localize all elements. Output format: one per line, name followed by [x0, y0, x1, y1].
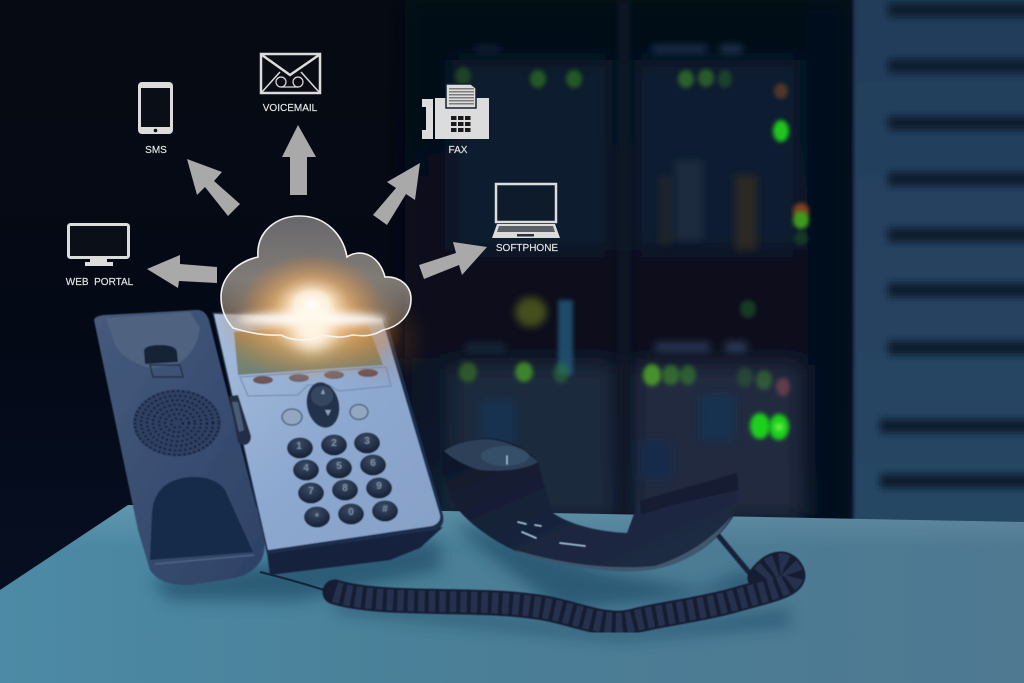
arrow: to web portal [147, 255, 217, 288]
handset highlights [507, 456, 585, 546]
keypad: 5 [336, 461, 342, 472]
keypad: * [315, 512, 319, 523]
mouthpiece rim [640, 473, 738, 515]
status lights [455, 67, 809, 440]
keypad: # [382, 504, 388, 515]
handset body [442, 438, 738, 571]
phone screen [234, 322, 383, 375]
server rack [405, 0, 850, 530]
icon: sms tablet [138, 82, 173, 134]
speaker grille [133, 390, 221, 456]
cloud outline [221, 216, 411, 340]
glow behind cloud [217, 253, 407, 383]
keypad [287, 432, 398, 528]
handset underside [515, 516, 732, 571]
label: softphone: SOFTPHONE [496, 243, 558, 254]
arrow: to voicemail [282, 125, 316, 195]
label: sms: SMS [145, 145, 167, 156]
orange haze around glow [330, 292, 430, 388]
earpiece recess [106, 312, 200, 368]
arrow: to softphone [419, 242, 487, 279]
keypad: 4 [303, 463, 309, 474]
blurred rack details [465, 0, 757, 520]
keypad: 2 [331, 438, 337, 449]
table shadows [150, 520, 790, 640]
earpiece cup [481, 446, 529, 466]
volume rocker [229, 395, 251, 445]
light streak [238, 310, 386, 350]
vent panel [853, 0, 1024, 535]
handset cord to phone [260, 572, 330, 592]
table [0, 505, 1024, 683]
keypad: 1 [296, 441, 302, 452]
icon: web portal monitor [68, 224, 128, 266]
side buttons [282, 404, 368, 425]
keypad: 7 [308, 486, 314, 497]
phone base shadow edge [267, 527, 443, 575]
label: voicemail: VOICEMAIL [263, 103, 318, 114]
icon: softphone laptop [492, 184, 560, 238]
arrow: to fax [373, 163, 420, 225]
handset cradle [94, 310, 265, 585]
softkey panel [240, 367, 391, 396]
arrow: to sms [187, 159, 240, 216]
phone body [212, 312, 443, 554]
cloud fill [221, 216, 411, 340]
softkeys [253, 369, 378, 384]
cradle hook [144, 345, 183, 377]
coiled cord [335, 528, 793, 623]
keypad: 9 [376, 481, 382, 492]
phone [94, 310, 443, 585]
keypad: 8 [342, 483, 348, 494]
keypad: 6 [370, 458, 376, 469]
label: fax: FAX [449, 145, 468, 156]
cradle lip [155, 555, 254, 564]
keypad: 0 [348, 507, 354, 518]
icon: fax machine [422, 84, 489, 139]
handset [335, 438, 793, 623]
cloud [220, 215, 412, 340]
earpiece top [444, 439, 538, 471]
icon: voicemail envelope [261, 54, 320, 93]
lower handset pocket [150, 477, 253, 560]
cloud light burst [248, 256, 376, 339]
keypad: 3 [364, 436, 370, 447]
label: web portal: WEB PORTAL [66, 277, 134, 288]
navigation button [303, 379, 343, 431]
